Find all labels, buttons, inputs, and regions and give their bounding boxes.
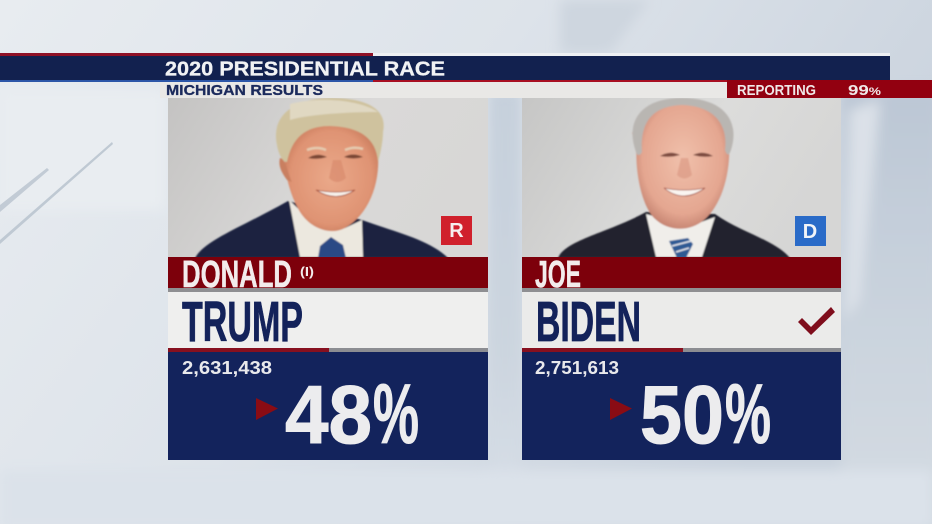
results box: 2,631,438 <box>182 358 272 378</box>
icon: arrow <box>256 398 278 420</box>
first name band <box>168 254 488 296</box>
results box <box>168 352 488 461</box>
icon: check mark <box>798 307 835 335</box>
first name band: JOE <box>535 254 581 296</box>
last name band <box>522 288 841 354</box>
first name band: DONALD <box>182 254 292 296</box>
reporting box: 99 % <box>848 82 881 99</box>
photo: Trump <box>168 98 488 258</box>
last name band: TRUMP <box>182 290 303 354</box>
party badge R: R <box>449 220 464 242</box>
panel: Donald Trump <box>168 98 488 461</box>
vote share bar <box>168 348 488 352</box>
results box: % <box>725 367 771 461</box>
results box <box>522 352 841 461</box>
results box: 50 <box>640 368 724 461</box>
last name band <box>168 288 488 354</box>
vote share bar <box>522 348 841 352</box>
panel: Joe Biden <box>522 98 841 461</box>
reporting box: REPORTING <box>737 83 816 99</box>
party badge D <box>795 216 826 246</box>
icon: arrow <box>610 398 632 420</box>
reporting box <box>727 80 932 99</box>
last name band: BIDEN <box>536 290 641 354</box>
party badge R <box>441 216 472 245</box>
first name band: (I) <box>300 264 314 279</box>
title: 2020 PRESIDENTIAL RACE <box>165 58 445 80</box>
results box: 48 <box>285 368 372 461</box>
first name band <box>522 254 841 296</box>
header bar <box>0 53 932 99</box>
party badge D: D <box>803 221 817 243</box>
subtitle: MICHIGAN RESULTS <box>166 82 323 99</box>
results box: 2,751,613 <box>535 358 619 378</box>
results box: % <box>373 367 419 461</box>
photo: Biden <box>522 98 841 258</box>
